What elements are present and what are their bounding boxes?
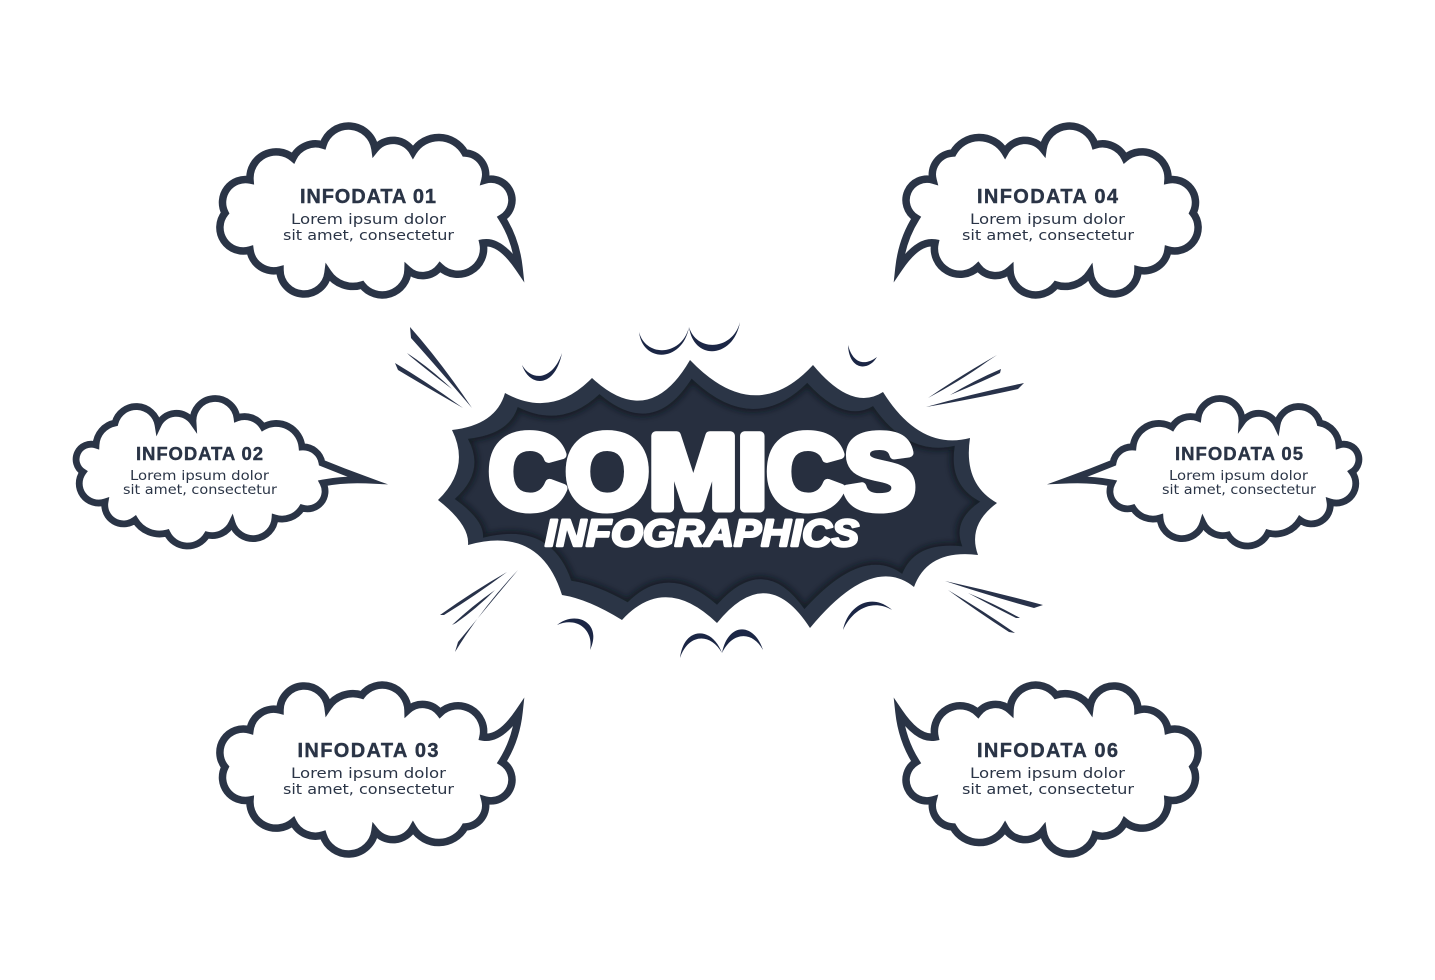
burst inner layer with shadow: [455, 378, 980, 609]
action lines: lower right: [945, 581, 1043, 633]
comic arcs around burst: [522, 322, 892, 658]
panel: infodata 02: [76, 399, 366, 546]
text block 02: [123, 468, 277, 498]
heading 01: INFODATA 01: [300, 186, 436, 208]
speech bubble outline 02: [76, 399, 366, 546]
speech bubble outline 03: [220, 685, 519, 854]
heading 04: INFODATA 04: [977, 186, 1119, 208]
text block 01: [283, 212, 454, 244]
speech bubble outline 06: [899, 685, 1198, 854]
panel: infodata 01: [220, 126, 519, 295]
heading 03: INFODATA 03: [298, 740, 438, 762]
text block 02: sit amet, consectetur: [123, 482, 277, 498]
heading 05: INFODATA 05: [1175, 443, 1303, 464]
text block 06: Lorem ipsum dolor: [970, 766, 1125, 782]
text block 04: Lorem ipsum dolor: [970, 212, 1125, 228]
text block 04: sit amet, consectetur: [962, 228, 1134, 244]
action lines: lower left: [440, 570, 518, 652]
text block 05: sit amet, consectetur: [1162, 482, 1316, 498]
title: COMICS: COMICS: [489, 414, 915, 531]
heading 06: INFODATA 06: [977, 740, 1118, 762]
speech bubble outline 04: [899, 126, 1198, 295]
text block 02: Lorem ipsum dolor: [130, 468, 269, 484]
heading 02: INFODATA 02: [136, 443, 263, 464]
text block 01: Lorem ipsum dolor: [291, 212, 446, 228]
action lines: upper left: [395, 327, 472, 408]
text block 06: [962, 766, 1134, 798]
text block 03: [283, 766, 454, 798]
text block 06: sit amet, consectetur: [962, 782, 1134, 798]
speech bubble outline 01: [220, 126, 519, 295]
subtitle: INFOGRAPHICS: INFOGRAPHICS: [545, 513, 859, 555]
text block 01: sit amet, consectetur: [283, 228, 454, 244]
panel: infodata 03: [220, 685, 519, 854]
text block 04: [962, 212, 1134, 244]
panel: infodata 04: [899, 126, 1198, 295]
panel: infodata 06: [899, 685, 1198, 854]
text block 05: Lorem ipsum dolor: [1169, 468, 1308, 484]
action lines: upper right: [926, 355, 1024, 407]
text block 03: sit amet, consectetur: [283, 782, 454, 798]
burst outer layer: [438, 360, 997, 628]
text block 03: Lorem ipsum dolor: [291, 766, 446, 782]
panel: infodata 05: [1069, 399, 1359, 546]
panel: central comic burst: [438, 360, 997, 628]
text block 05: [1162, 468, 1316, 498]
speech bubble outline 05: [1069, 399, 1359, 546]
